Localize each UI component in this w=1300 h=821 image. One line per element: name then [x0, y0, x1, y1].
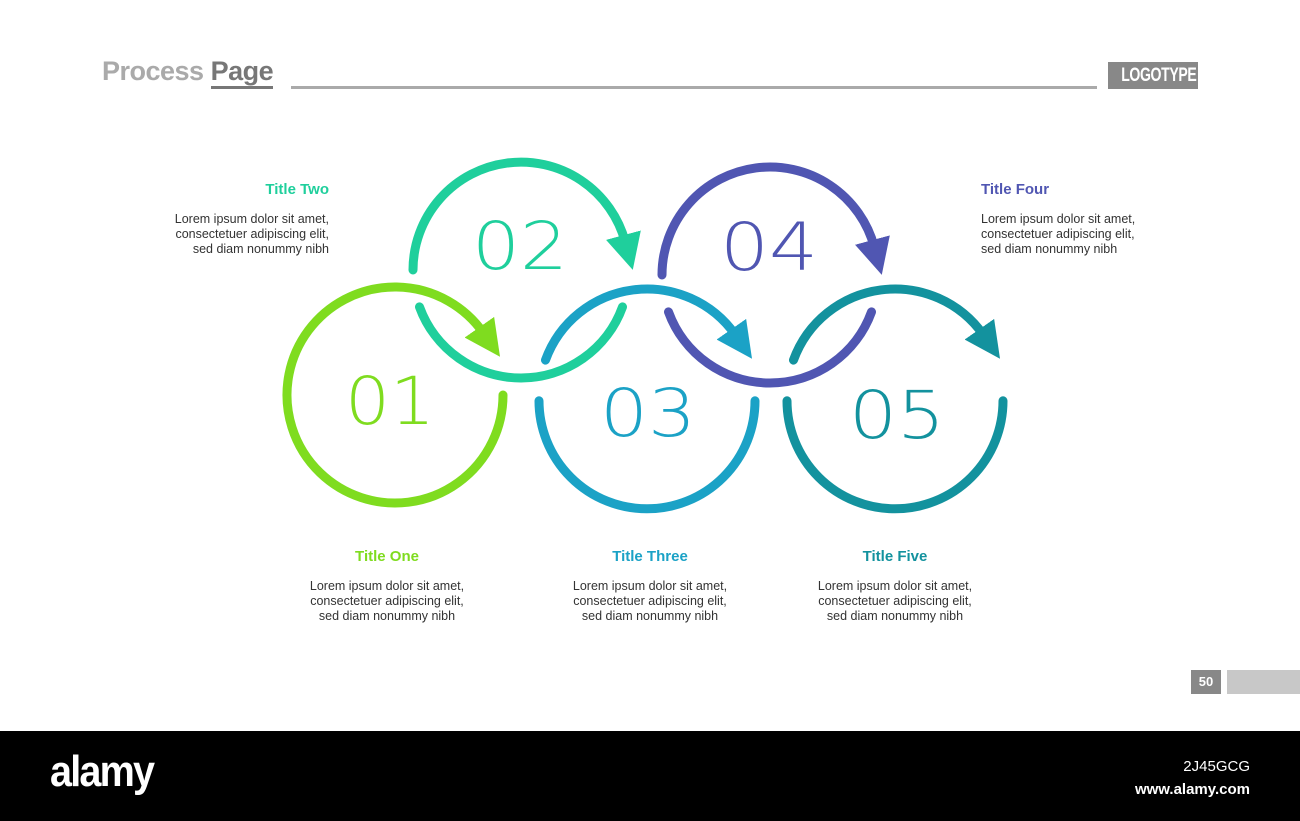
page bar [1227, 670, 1300, 694]
text: title five: Title Five [863, 548, 927, 565]
footer logo: alamy [50, 747, 153, 796]
circle 01 [287, 287, 503, 503]
text: title two: consectetuer adipiscing elit, [175, 227, 329, 241]
page number: 50 [1199, 674, 1213, 689]
text: title three [573, 548, 727, 623]
text: title five: sed diam nonummy nibh [827, 609, 963, 623]
circle 05 [787, 289, 1003, 509]
title: Process Page [102, 56, 273, 86]
number 02: 02 [472, 208, 568, 285]
text: title four: Title Four [981, 181, 1049, 198]
text: title four [981, 181, 1135, 256]
text: title four: Lorem ipsum dolor sit amet, [981, 212, 1135, 226]
text: title two: sed diam nonummy nibh [193, 242, 329, 256]
number 05: 05 [849, 377, 945, 454]
footer id: 2J45GCG [1183, 758, 1250, 775]
circle 04 [662, 167, 874, 383]
header rule [291, 86, 1097, 89]
number 04: 04 [720, 209, 818, 286]
circle 03 [539, 289, 755, 509]
footer id: www.alamy.com [1135, 781, 1250, 798]
text: title one [310, 548, 464, 623]
text: title two: Title Two [265, 181, 329, 198]
text: title one: Title One [355, 548, 419, 565]
text: title two: Lorem ipsum dolor sit amet, [175, 212, 329, 226]
text: title one: Lorem ipsum dolor sit amet, [310, 579, 464, 593]
page number [1191, 670, 1221, 694]
text: title one: consectetuer adipiscing elit, [310, 594, 464, 608]
text: title two [175, 181, 329, 256]
logotype [1108, 62, 1198, 89]
text: title three: Title Three [612, 548, 688, 565]
logotype: LOGOTYPE [1121, 65, 1196, 86]
text: title five: consectetuer adipiscing elit, [818, 594, 972, 608]
number 03: 03 [600, 375, 696, 452]
text: title three: Lorem ipsum dolor sit amet, [573, 579, 727, 593]
text: title four: sed diam nonummy nibh [981, 242, 1117, 256]
text: title five [818, 548, 972, 623]
footer id [1135, 758, 1250, 798]
footer band [0, 731, 1300, 821]
text: title five: Lorem ipsum dolor sit amet, [818, 579, 972, 593]
number 01: 01 [345, 363, 435, 440]
circle 02 [413, 162, 625, 378]
text: title four: consectetuer adipiscing elit, [981, 227, 1135, 241]
text: title three: sed diam nonummy nibh [582, 609, 718, 623]
text: title three: consectetuer adipiscing elit, [573, 594, 727, 608]
text: title one: sed diam nonummy nibh [319, 609, 455, 623]
